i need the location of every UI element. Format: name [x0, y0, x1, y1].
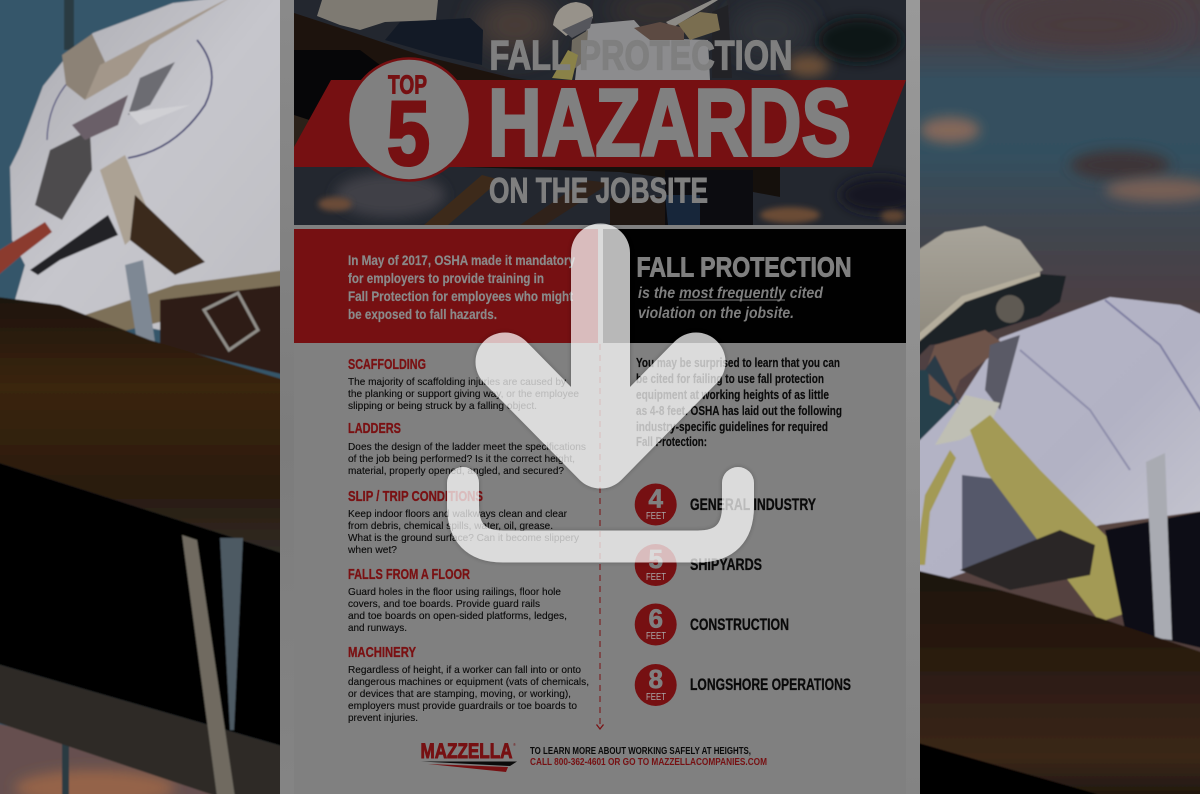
height item: general industry, 4 feet	[635, 484, 816, 526]
hazard: machinery	[348, 644, 589, 724]
height item: general industry, 4 feet: GENERAL INDUSTRY	[690, 495, 816, 514]
hazard: machinery: dangerous machines or equipment (vats of chemicals,	[348, 676, 589, 688]
hazard: slip and trip conditions: from debris, chemical spills, water, oil, grease.	[348, 520, 553, 532]
Mazzella logo: MAZZELLA	[420, 740, 512, 763]
height item: longshore operations, 8 feet: FEET	[646, 691, 666, 703]
hazard: slip and trip conditions: when wet?	[347, 544, 397, 556]
hazard: falls from a floor: Guard holes in the floor using railings, floor hole	[348, 586, 561, 598]
hazard: scaffolding: slipping or being struck by a falling object.	[348, 400, 537, 412]
dashed divider arrow	[596, 344, 604, 729]
hazard: ladders: material, properly opened, angled, and secured?	[348, 465, 564, 477]
hazard: slip and trip conditions: Keep indoor floors and walkways clean and clear	[348, 508, 567, 520]
hazard: slip and trip conditions: What is the ground surface? Can it become slippery	[348, 532, 580, 544]
panel: most frequently cited	[603, 229, 906, 343]
hazard: falls from a floor	[348, 566, 567, 634]
height item: longshore operations, 8 feet: LONGSHORE OPERATIONS	[690, 675, 851, 694]
height item: shipyards, 5 feet	[635, 544, 762, 586]
title text: FALL PROTECTION	[490, 32, 792, 78]
footer call to action: TO LEARN MORE ABOUT WORKING SAFELY AT HEIGHTS,	[530, 745, 751, 757]
hazard: machinery: Regardless of height, if a worker can fall into or onto	[348, 664, 581, 676]
panel: OSHA notice: for employers to provide training in	[348, 270, 544, 286]
height item: construction, 6 feet: FEET	[646, 630, 666, 642]
title text: ON THE JOBSITE	[489, 172, 708, 210]
hazard: ladders: Does the design of the ladder meet the specifications	[348, 441, 586, 453]
guidelines intro paragraph: as 4-8 feet. OSHA has laid out the following	[636, 403, 842, 418]
height item: shipyards, 5 feet: SHIPYARDS	[690, 555, 762, 574]
height item: shipyards, 5 feet: 5	[648, 544, 663, 574]
hazard: scaffolding: The majority of scaffolding injuries are caused by	[348, 376, 567, 388]
header photo: workers on steel against a dusk sky	[294, 0, 920, 225]
panel: OSHA notice: be exposed to fall hazards.	[348, 306, 497, 322]
hazard: machinery: or devices that are stamping, moving, or working),	[348, 688, 571, 700]
panel: OSHA notice: In May of 2017, OSHA made it mandatory	[348, 252, 575, 268]
panel: most frequently cited: violation on the jobsite.	[638, 305, 794, 322]
hazard: falls from a floor: covers, and toe boards. Provide guard rails	[348, 598, 540, 610]
guidelines intro paragraph	[636, 355, 842, 449]
Mazzella logo	[420, 740, 517, 772]
poster background band	[280, 0, 920, 794]
guidelines intro paragraph: Fall Protection:	[636, 434, 707, 449]
panel: OSHA notice	[294, 229, 598, 343]
hazard: falls from a floor: and toe boards on open-sided platforms, ledges,	[348, 610, 567, 622]
right background photo: worker with hard hat and yellow harness	[915, 0, 1200, 794]
height item: construction, 6 feet	[635, 604, 789, 646]
guidelines intro paragraph: industry-specific guidelines for required	[636, 419, 828, 434]
hazard: machinery: MACHINERY	[348, 644, 416, 661]
hazard: slip and trip conditions: SLIP / TRIP CONDITIONS	[348, 488, 483, 505]
panel: most frequently cited: is the most frequently cited	[638, 285, 824, 302]
panel: OSHA notice: Fall Protection for employees who might	[348, 288, 573, 304]
height item: general industry, 4 feet: FEET	[646, 510, 666, 522]
height item: longshore operations, 8 feet: 8	[648, 664, 663, 694]
guidelines intro paragraph: equipment at working heights of as little	[636, 387, 829, 402]
title text	[488, 32, 851, 210]
hazard: falls from a floor: FALLS FROM A FLOOR	[348, 566, 470, 583]
hazard: ladders	[348, 420, 586, 477]
top 5 badge	[348, 58, 470, 184]
hazard: scaffolding: the planking or support giving way, or the employee	[348, 388, 579, 400]
hazard: scaffolding: SCAFFOLDING	[348, 356, 426, 373]
height item: construction, 6 feet: CONSTRUCTION	[690, 615, 789, 634]
red title banner	[294, 80, 906, 167]
Mazzella logo: ®	[513, 742, 516, 747]
height item: construction, 6 feet: 6	[648, 604, 663, 634]
height item: shipyards, 5 feet: FEET	[646, 571, 666, 583]
top 5 badge: 5	[387, 84, 430, 184]
footer call to action: CALL 800-362-4601 OR GO TO MAZZELLACOMPANIES.COM	[530, 756, 767, 768]
icon: download arrow overlay	[463, 253, 738, 546]
left background photo: worker with harness on steel beam	[0, 0, 285, 794]
panel: most frequently cited: FALL PROTECTION	[636, 252, 852, 282]
guidelines intro paragraph: You may be surprised to learn that you can	[636, 355, 840, 370]
hazard: ladders: of the job being performed? Is it the correct height,	[348, 453, 575, 465]
hazard: falls from a floor: and runways.	[348, 622, 407, 634]
height item: longshore operations, 8 feet	[635, 664, 851, 706]
footer call to action	[530, 745, 767, 768]
height item: general industry, 4 feet: 4	[648, 484, 664, 514]
hazard: ladders: LADDERS	[348, 420, 401, 437]
hazard: machinery: prevent injuries.	[348, 712, 418, 724]
title text: HAZARDS	[488, 70, 851, 176]
top 5 badge: TOP	[388, 70, 427, 100]
hazard: scaffolding	[348, 356, 579, 412]
hazard: machinery: employers must provide guardrails or toe boards to	[348, 700, 577, 712]
guidelines intro paragraph: be cited for failing to use fall protection	[636, 371, 824, 386]
hazard: slip and trip conditions	[347, 488, 580, 556]
